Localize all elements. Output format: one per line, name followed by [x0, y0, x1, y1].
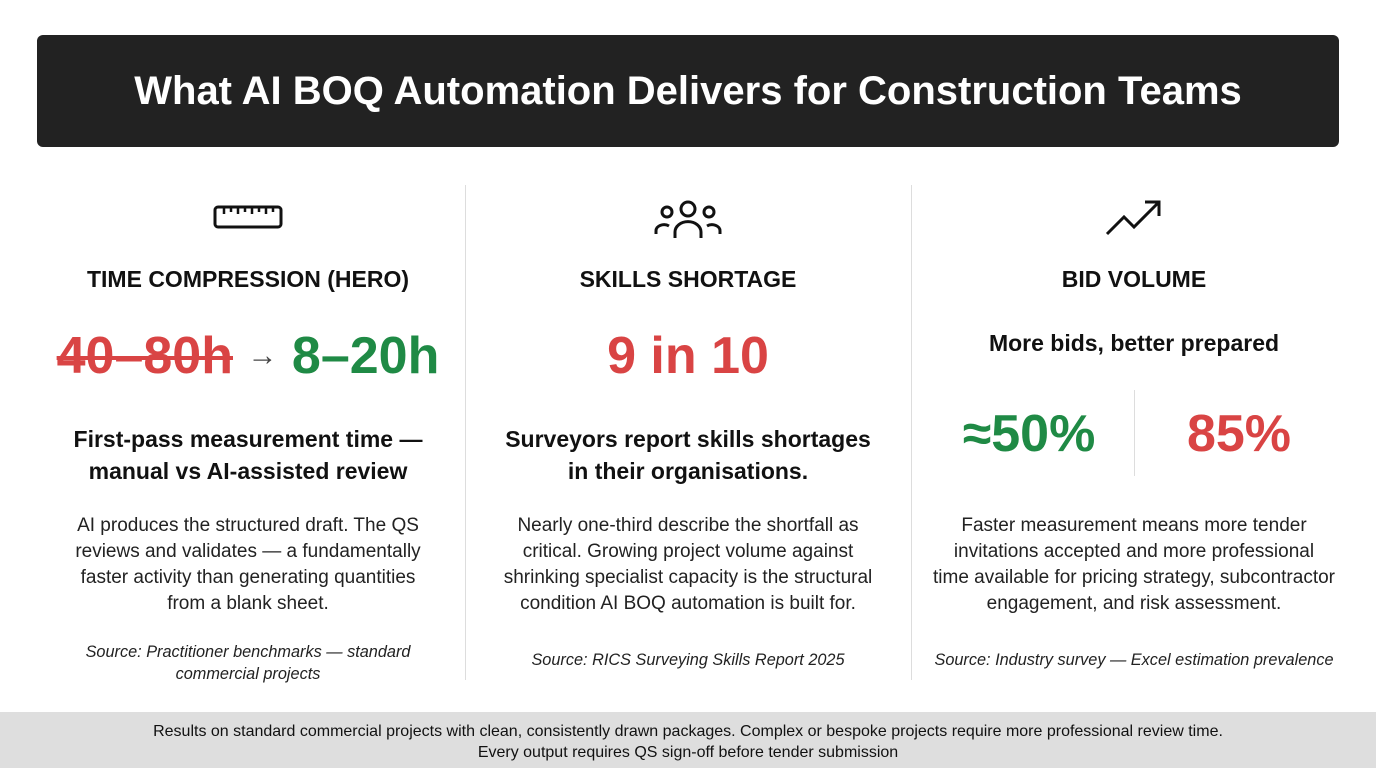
footer note [0, 712, 1376, 768]
footer note: Every output requires QS sign-off before tender submission [478, 744, 898, 761]
source: commercial projects [176, 665, 320, 683]
subheading [505, 426, 871, 484]
body text [504, 515, 872, 614]
body text [75, 515, 421, 614]
body text: Faster measurement means more tender [961, 515, 1307, 536]
subheading [74, 426, 422, 484]
body text [933, 515, 1335, 614]
body text: condition AI BOQ automation is built for. [520, 593, 856, 614]
footer note: Results on standard commercial projects with clean, consistently drawn packages. Complex or bespoke projects require more professional review time. [153, 723, 1223, 740]
icon: ruler [214, 206, 282, 228]
panel: time compression [56, 206, 439, 683]
body text: Nearly one-third describe the shortfall as [517, 515, 859, 536]
subheading: Surveyors report skills shortages [505, 426, 871, 452]
icon: people [654, 200, 722, 238]
body text: from a blank sheet. [167, 593, 329, 614]
panel: bid volume [933, 200, 1335, 669]
subheading: manual vs AI-assisted review [89, 458, 407, 484]
body text: AI produces the structured draft. The QS [77, 515, 419, 536]
subheading: First-pass measurement time — [74, 426, 422, 452]
source: Source: Practitioner benchmarks — standard [86, 643, 410, 661]
big number: 9 in 10 [607, 327, 769, 385]
source: Source: Industry survey — Excel estimation prevalence [934, 651, 1334, 669]
heading: SKILLS SHORTAGE [580, 266, 796, 292]
tagline: More bids, better prepared [989, 330, 1279, 356]
subheading: in their organisations. [568, 458, 808, 484]
big number: 40–80h → 8–20h [57, 327, 439, 385]
body text: time available for pricing strategy, subcontractor [933, 567, 1335, 588]
stat 50%: ≈50% [963, 405, 1095, 463]
body text: invitations accepted and more professional [954, 541, 1314, 562]
heading: TIME COMPRESSION (HERO) [87, 266, 409, 292]
body text: shrinking specialist capacity is the structural [504, 567, 872, 588]
stat 85%: 85% [1187, 405, 1291, 463]
source [86, 643, 411, 683]
title bar [37, 35, 1339, 147]
body text: faster activity than generating quantities [81, 567, 415, 588]
panel: skills shortage [504, 200, 872, 669]
source: Source: RICS Surveying Skills Report 2025 [531, 651, 845, 669]
heading: BID VOLUME [1062, 266, 1206, 292]
icon: trend arrow [1106, 200, 1160, 235]
stats [963, 390, 1291, 476]
body text: reviews and validates — a fundamentally [75, 541, 421, 562]
body text: engagement, and risk assessment. [987, 593, 1281, 614]
title bar: What AI BOQ Automation Delivers for Construction Teams [134, 69, 1242, 113]
body text: critical. Growing project volume against [523, 541, 853, 562]
